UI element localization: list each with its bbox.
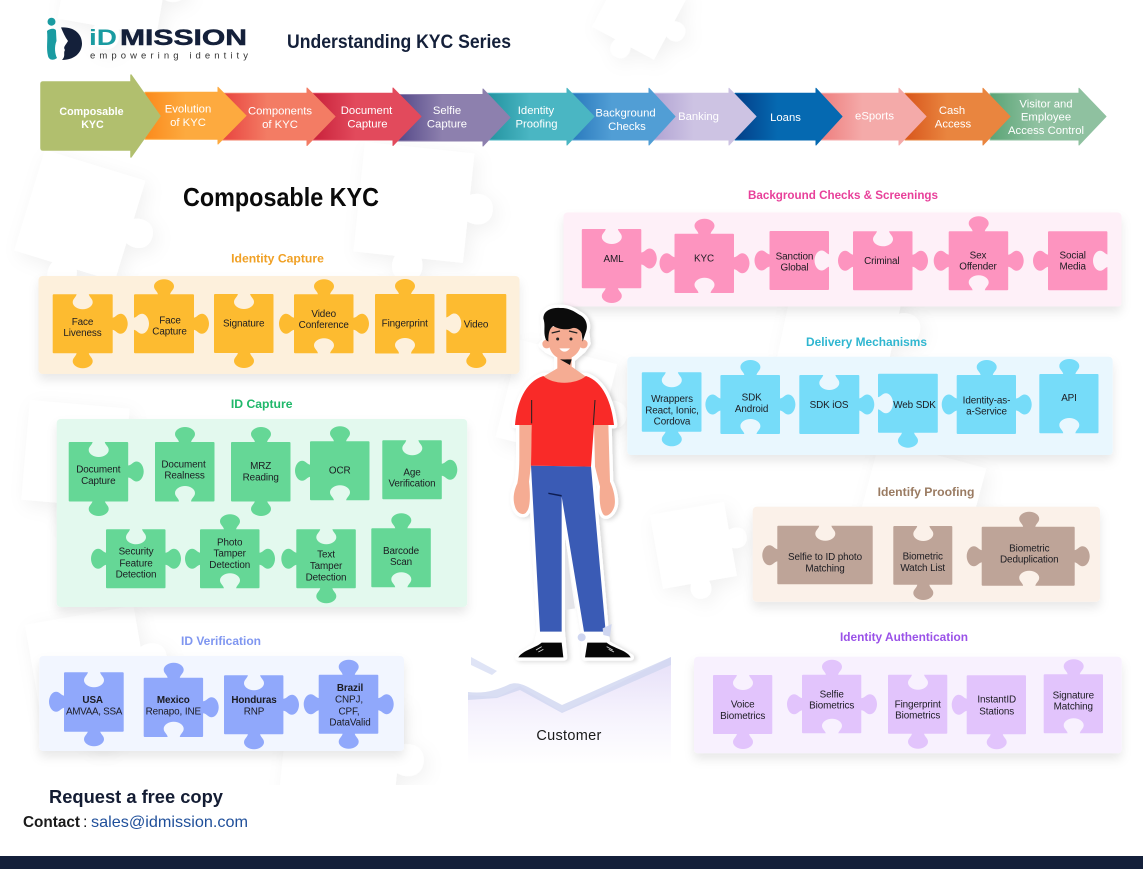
arrow chain: Access Control (1008, 125, 1084, 137)
piece: Social Media (1033, 231, 1109, 290)
arrow chain: KYC (81, 119, 104, 131)
piece: Fingerprint Biometrics: Fingerprint (895, 699, 941, 710)
piece: Identity-as-a-Service (942, 360, 1032, 434)
piece: Biometric Deduplication (967, 512, 1090, 587)
piece: Wrappers: Wrappers (651, 394, 693, 405)
piece: Video Conference (279, 279, 369, 354)
piece: Sanction Global (754, 231, 830, 290)
piece: SDK Android (705, 360, 795, 435)
socks (578, 633, 586, 641)
piece: Voice Biometrics: Biometrics (720, 711, 765, 722)
piece: API (1039, 359, 1098, 434)
piece: Photo Tamper Detection: Tamper (214, 549, 247, 560)
piece: SDK Android: SDK (742, 392, 762, 403)
arrow chain: Document (341, 105, 393, 117)
arrow chain: eSports (855, 110, 894, 122)
piece: Age Verification: Age (403, 467, 421, 478)
arrow chain (41, 75, 1106, 157)
heading: Delivery Mechanisms: Delivery Mechanisms (806, 335, 927, 349)
arrow chain: Proofing (515, 118, 558, 130)
piece: Mexico: Mexico (157, 695, 190, 706)
piece: Honduras: Honduras (231, 695, 277, 706)
piece: Wrappers: Cordova (654, 417, 691, 428)
arrow chain: Capture (427, 118, 467, 130)
arrow chain: Access (935, 118, 972, 130)
piece: Face Liveness: Face (72, 317, 94, 328)
piece: Social Media: Media (1059, 262, 1087, 273)
piece: Video (445, 294, 506, 368)
logo: IDmission: iD (89, 25, 117, 50)
piece: USA: AMVAA, SSA (66, 707, 123, 718)
customer platform (468, 657, 671, 765)
face (548, 326, 582, 359)
main heading: Composable KYC (183, 182, 379, 212)
piece: Selfie to ID photo Matching: Selfie to ID photo (788, 552, 863, 563)
piece: Fingerprint Biometrics: Biometrics (895, 711, 940, 722)
piece: Criminal (838, 230, 928, 290)
piece: Selfie Biometrics: Biometrics (809, 701, 854, 712)
piece: Face Liveness (53, 293, 128, 368)
piece: Text Tamper Detection: Text (317, 549, 335, 560)
piece: Document Capture: Capture (81, 476, 116, 487)
piece: InstantID Stations (952, 675, 1026, 749)
piece: Wrappers: React, Ionic, (645, 405, 699, 416)
piece: Text Tamper Detection: Detection (306, 572, 346, 583)
panel: Identify Proofing (753, 507, 1100, 602)
piece: USA (49, 671, 124, 746)
piece: Photo Tamper Detection (185, 514, 275, 589)
piece: Text Tamper Detection: Tamper (310, 561, 343, 572)
piece: Brazil (304, 660, 394, 749)
piece: Honduras: RNP (244, 707, 265, 718)
piece: Selfie to ID photo Matching: Matching (805, 563, 845, 574)
heading: ID Verification: ID Verification (181, 634, 261, 648)
piece: Mexico: Renapo, INE (146, 707, 202, 718)
piece: Identity-as-a-Service: Identity-as- (963, 396, 1010, 407)
piece: Sanction Global: Global (781, 263, 808, 274)
footer bar (0, 856, 1143, 869)
label: Customer: Customer (536, 728, 602, 744)
piece: Face Capture: Capture (152, 326, 187, 338)
piece: Sanction Global: Sanction (776, 251, 813, 262)
piece: Social Media: Social (1060, 250, 1086, 261)
piece: KYC: KYC (694, 253, 714, 264)
arrow chain: Banking (678, 111, 719, 123)
heading: Identity Capture: Identity Capture (231, 252, 324, 266)
arrow chain: Visitor and (1019, 98, 1073, 110)
arrow chain: Cash (939, 105, 965, 117)
logo: IDmission: empowering identity (90, 50, 248, 62)
piece: Face Liveness: Liveness (63, 328, 102, 339)
piece: Mexico (144, 663, 219, 738)
piece: Text Tamper Detection (281, 528, 356, 603)
piece: KYC (660, 219, 750, 294)
piece: Document Capture (69, 441, 144, 516)
arrow chain: of KYC (262, 119, 298, 131)
piece: Document Realness: Realness (164, 470, 205, 481)
piece: SDK iOS (799, 374, 874, 434)
piece: Security Feature Detection (91, 528, 181, 588)
piece: OCR: OCR (329, 466, 351, 477)
piece: Video Conference: Video (311, 309, 337, 320)
piece: Security Feature Detection: Detection (116, 570, 156, 581)
arrow chain: Identity (518, 105, 555, 117)
piece: Criminal: Criminal (864, 256, 900, 267)
piece: SDK Android: Android (735, 404, 768, 415)
piece: Sex Offender: Sex (970, 250, 987, 261)
shoes (518, 643, 563, 657)
piece: Signature (214, 293, 274, 368)
piece: Brazil: CNPJ, (335, 695, 363, 706)
piece: Video: Video (464, 320, 489, 330)
arrow chain: Evolution (165, 104, 211, 116)
panel: ID Verification (39, 656, 404, 751)
panel: Background Checks (564, 212, 1122, 306)
person: customer (514, 308, 631, 657)
contact: : (83, 814, 87, 831)
piece: Document Realness: Document (161, 459, 206, 470)
piece: USA: USA (82, 695, 103, 706)
piece: Voice Biometrics (713, 674, 772, 749)
piece: AML: AML (603, 254, 624, 265)
heading: Identity Authentication: Identity Authentication (840, 630, 968, 644)
contact: sales@idmission.com (91, 814, 248, 831)
shirt (515, 376, 614, 467)
piece: Document Capture: Document (76, 464, 121, 476)
logo: IDmission: MISSION (120, 25, 247, 50)
arrow chain: Components (248, 106, 312, 118)
contact (23, 814, 248, 831)
piece: AML (582, 228, 657, 303)
pants (531, 466, 606, 632)
arrow chain: Composable (59, 106, 124, 118)
piece: Brazil: Brazil (337, 683, 363, 694)
arrow chain: Checks (608, 121, 646, 133)
piece: Biometric Watch List: Watch List (900, 563, 945, 574)
left arm (514, 423, 532, 514)
piece: Document Realness (155, 427, 214, 502)
heading: Background Checks: Background Checks & Screenings (748, 188, 938, 202)
heading: Identify Proofing: Identify Proofing (878, 485, 974, 499)
piece: Identity-as-a-Service: a-Service (966, 407, 1008, 418)
arrow chain: Capture (347, 118, 388, 130)
piece: Brazil: CPF, (338, 706, 360, 717)
piece: Web SDK: Web SDK (893, 400, 936, 411)
call to action: Request a free copy (49, 786, 224, 807)
heading: ID Capture: ID Capture (231, 397, 293, 411)
piece: MRZ Reading (231, 427, 290, 516)
piece: Photo Tamper Detection: Photo (217, 537, 243, 548)
piece: Fingerprint (375, 279, 434, 354)
background puzzle pieces (34, 0, 984, 785)
piece: Sex Offender: Offender (959, 262, 998, 273)
piece: Selfie Biometrics: Selfie (820, 689, 844, 700)
piece: Fingerprint Biometrics (888, 674, 947, 749)
piece: Face Capture: Face (159, 316, 181, 326)
piece: API: API (1061, 393, 1077, 404)
panel: Delivery Mechanisms (627, 357, 1113, 455)
piece: Face Capture (133, 279, 209, 353)
piece: Web SDK (877, 374, 938, 448)
ears (542, 340, 551, 348)
hair (543, 308, 587, 342)
piece: Security Feature Detection: Security (119, 547, 154, 558)
right arm (594, 423, 615, 516)
piece: Video Conference: Conference (299, 320, 349, 331)
piece: Barcode Scan: Barcode (383, 546, 420, 557)
arrow chain: Employee (1021, 112, 1071, 124)
piece: Honduras (224, 674, 299, 749)
piece: Barcode Scan (371, 513, 431, 588)
piece: Photo Tamper Detection: Detection (209, 560, 250, 571)
piece: InstantID Stations: InstantID (977, 695, 1016, 706)
piece: MRZ Reading: Reading (243, 472, 279, 483)
piece: Age Verification (382, 439, 457, 499)
piece: Biometric Deduplication: Deduplication (1000, 555, 1059, 566)
piece: Security Feature Detection: Feature (119, 558, 153, 569)
arrow chain: Loans (770, 112, 801, 124)
piece: Fingerprint: Fingerprint (382, 319, 428, 330)
piece: Age Verification: Verification (388, 478, 436, 489)
arrow chain: Selfie (433, 105, 461, 117)
piece: InstantID Stations: Stations (979, 706, 1014, 717)
title: series: Understanding KYC Series (287, 32, 511, 53)
piece: Selfie Biometrics (787, 660, 877, 735)
panel: Identity Authentication (694, 657, 1122, 753)
arrow chain: of KYC (170, 117, 206, 129)
piece: Signature: Signature (223, 319, 265, 330)
neck (543, 355, 586, 383)
piece: SDK iOS: SDK iOS (810, 400, 849, 411)
piece: Barcode Scan: Scan (390, 557, 412, 568)
piece: Selfie to ID photo Matching (762, 525, 873, 584)
piece: Wrappers (642, 371, 702, 446)
piece: OCR (295, 426, 370, 501)
contact: Contact (23, 814, 81, 831)
piece: Signature Matching (1044, 659, 1103, 734)
piece: Signature Matching: Matching (1054, 702, 1093, 713)
piece: Voice Biometrics: Voice (731, 700, 755, 711)
piece: Biometric Watch List: Biometric (903, 552, 943, 563)
piece: Biometric Watch List (893, 525, 952, 600)
piece: Sex Offender (934, 216, 1024, 291)
panel: Identity Capture (38, 276, 520, 374)
piece: Brazil: DataValid (329, 717, 371, 728)
piece: Biometric Deduplication: Biometric (1009, 543, 1050, 554)
panel: ID Capture (57, 419, 467, 607)
piece: Signature Matching: Signature (1053, 690, 1095, 701)
arrow chain: Background (595, 108, 656, 120)
logo: IDmission (47, 18, 248, 62)
piece: MRZ Reading: MRZ (250, 461, 271, 472)
